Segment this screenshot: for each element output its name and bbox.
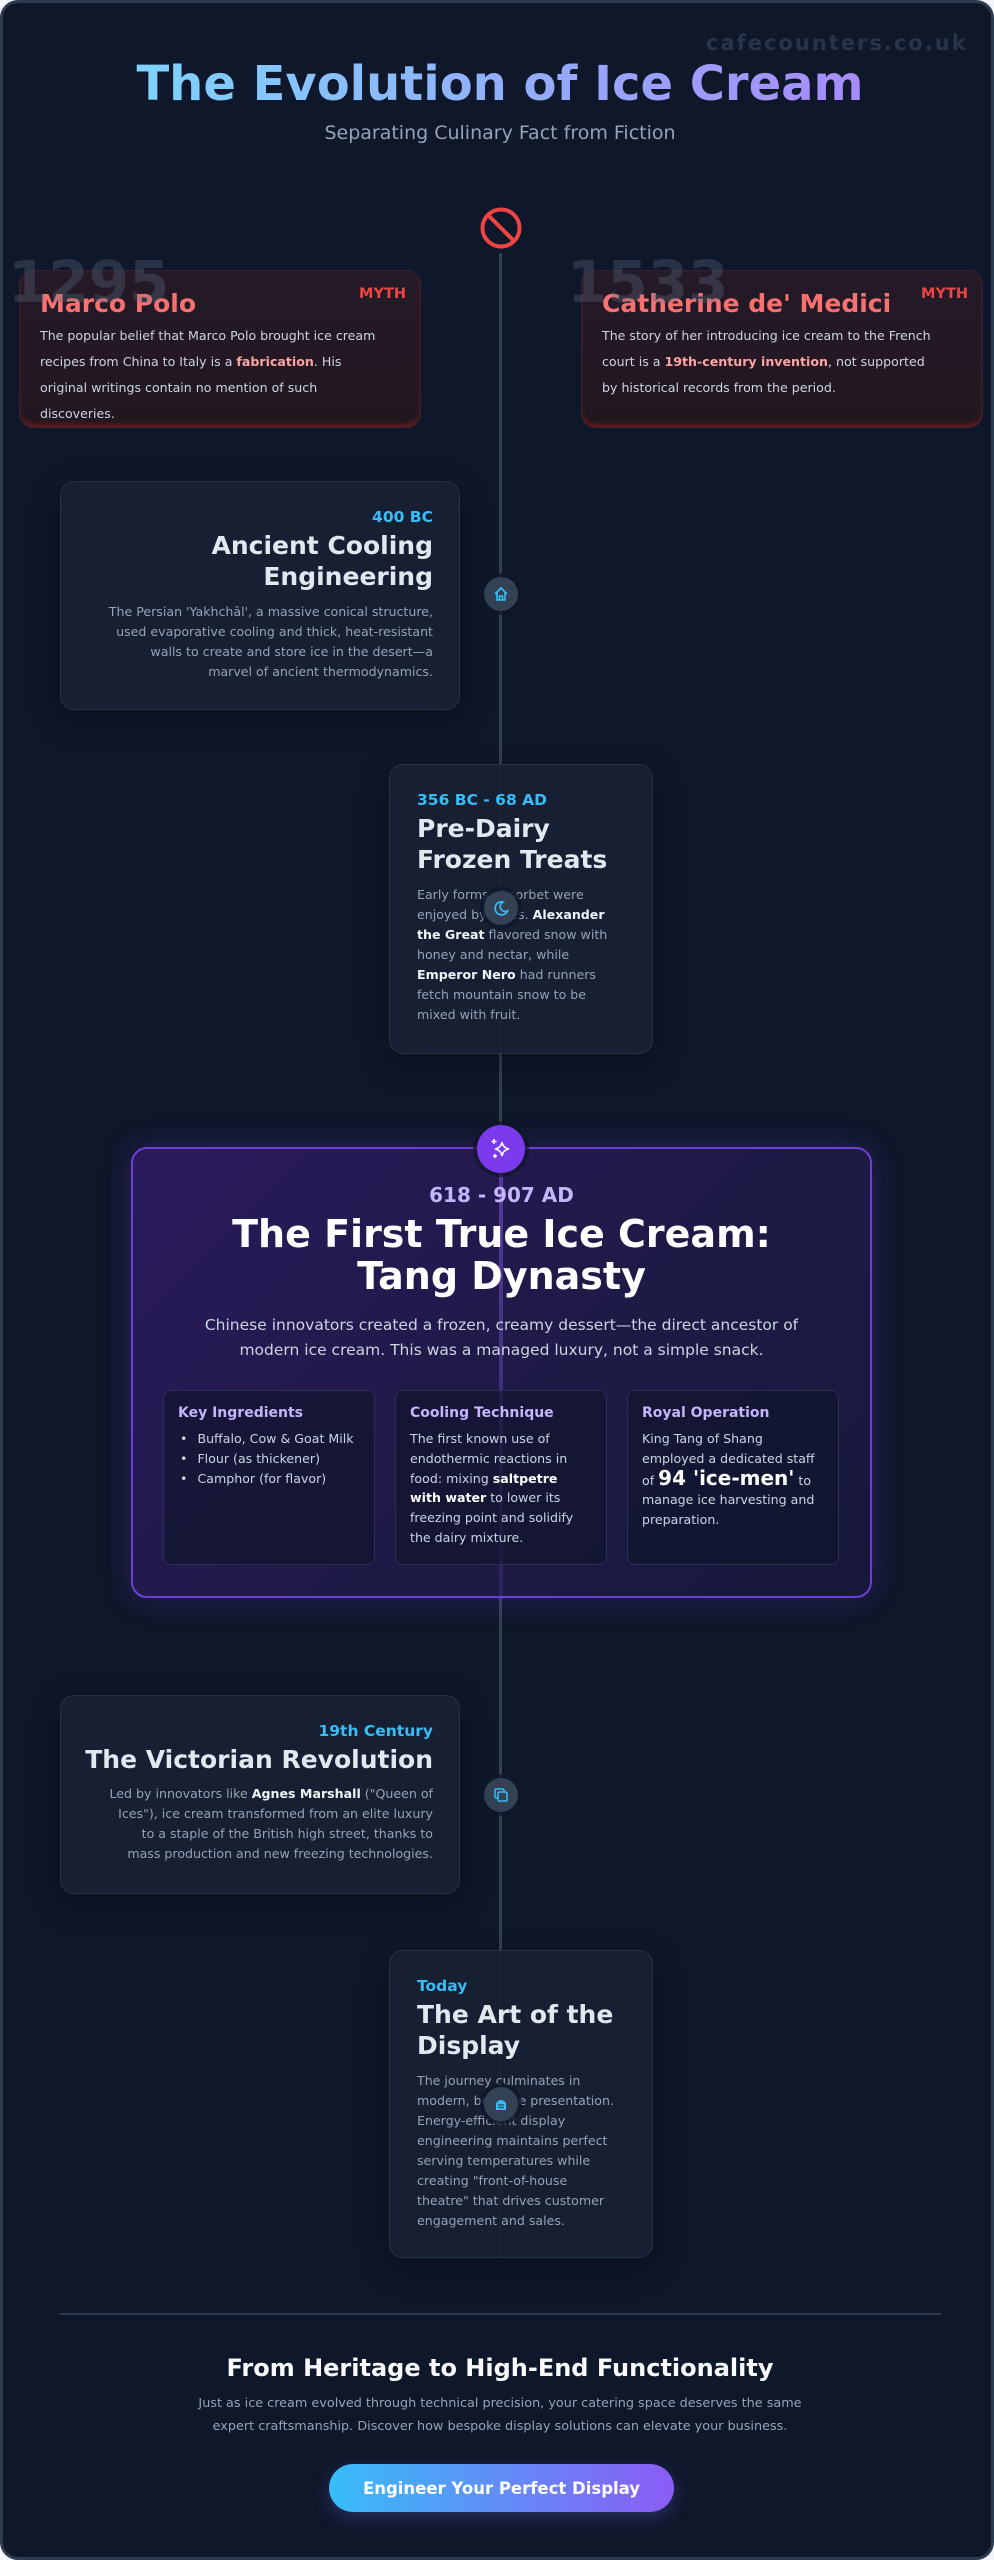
sub-panel: cooling technique: The first known use of endothermic reactions in food: mixing saltpetre with water to lower its freezing point and solidify the dairy mixture.: [410, 1431, 573, 1545]
divider: [60, 2313, 941, 2315]
button: [329, 2464, 674, 2512]
date: 19th Century: [318, 1722, 433, 1740]
text: The Persian 'Yakhchāl', a massive conical structure, used evaporative cooling and thick, heat-resistant walls to create and store ice in the desert—a marvel of ancient thermodynamics.: [109, 604, 433, 679]
sub-panel: cooling technique: Cooling Technique: [410, 1405, 554, 1421]
sub-panel: key ingredients: [163, 1390, 375, 1565]
footer text: Just as ice cream evolved through technical precision, your catering space deserves the same expert craftsmanship. Discover how bespoke display solutions can elevate your business.: [198, 2396, 802, 2434]
label: myth tag: MYTH: [921, 286, 968, 302]
panel: myth Catherine de' Medici: [581, 270, 983, 428]
heading: The First True Ice Cream:: [232, 1212, 771, 1256]
date: Today: [417, 1977, 467, 1995]
text: Catherine myth: The story of her introducing ice cream to the French court is a 19th-century invention, not supported by historical records from the period.: [602, 328, 931, 395]
heading: Catherine: Catherine de' Medici: [602, 289, 891, 318]
heading: Marco Polo: Marco Polo: [40, 289, 196, 318]
heading: The Victorian Revolution: [85, 1745, 433, 1774]
heading: [417, 2000, 613, 2060]
icon: sparkle node: [477, 1125, 525, 1173]
button: Engineer Your Perfect Display: [363, 2478, 640, 2498]
panel: Tang Dynasty: [131, 1147, 872, 1598]
panel: 19th century: [60, 1695, 460, 1894]
icon: counter node: [484, 2087, 518, 2121]
icon: myth prohibited: [480, 208, 522, 248]
sub-panel: royal operation: [627, 1390, 839, 1565]
icon: display node: [484, 1778, 518, 1812]
sub-panel: royal operation: King Tang of Shang employed a dedicated staff of 94 'ice-men' to manage ice harvesting and preparation.: [642, 1431, 815, 1527]
year 1295: 1295: [8, 248, 169, 316]
date: 356 BC - 68 AD: [417, 791, 547, 809]
watermark: cafecounters.co.uk: [706, 31, 968, 55]
label: myth tag: MYTH: [359, 286, 406, 302]
text: Marco Polo myth: The popular belief that Marco Polo brought ice cream recipes from China to Italy is a fabrication. His original writings contain no mention of such discoveries.: [40, 328, 375, 421]
text: The journey culminates in modern, bespoke presentation. Energy-efficient display engineering maintains perfect serving temperatures while creating "front-of-house theatre" that drives customer engagement and sales.: [417, 2073, 614, 2228]
panel: 356 BC - 68 AD: [389, 764, 653, 1054]
icon: house node: [484, 577, 518, 611]
panel: 400 BC: [60, 481, 460, 710]
sub-panel: royal operation: Royal Operation: [642, 1405, 770, 1421]
heading: [212, 531, 433, 591]
text: Chinese innovators created a frozen, creamy dessert—the direct ancestor of modern ice cream. This was a managed luxury, not a simple snack.: [205, 1316, 798, 1359]
title: The Evolution of Ice Cream: [136, 56, 864, 112]
sub-panel: key ingredients: Flour (as thickener): [197, 1451, 320, 1466]
heading: The Art of the: [417, 2000, 613, 2029]
heading: Engineering: [263, 562, 433, 591]
footer heading: From Heritage to High-End Functionality: [227, 2354, 773, 2382]
sub-panel: cooling technique: [395, 1390, 607, 1565]
year 1533: 1533: [567, 248, 728, 316]
panel: myth Marco Polo: [19, 270, 421, 428]
line overlay: [499, 1149, 503, 1596]
text: Early forms of sorbet were enjoyed by elites. Alexander the Great flavored snow with honey and nectar, while Emperor Nero had runners fetch mountain snow to be mixed with fruit.: [417, 887, 607, 1022]
heading: Display: [417, 2031, 520, 2060]
subtitle: Separating Culinary Fact from Fiction: [324, 122, 676, 144]
sub-panel: key ingredients: Key Ingredients: [178, 1405, 303, 1421]
sub-panel: key ingredients: Buffalo, Cow & Goat Milk: [197, 1431, 354, 1446]
heading: [417, 814, 607, 874]
timeline line: [499, 253, 502, 2258]
heading: Frozen Treats: [417, 845, 607, 874]
text: Led by innovators like Agnes Marshall ("Queen of Ices"), ice cream transformed from an elite luxury to a staple of the British high street, thanks to mass production and new freezing technologies.: [109, 1786, 433, 1861]
date: 400 BC: [372, 508, 433, 526]
date: 618 - 907 AD: [429, 1183, 574, 1207]
heading: [232, 1212, 771, 1298]
heading: Tang Dynasty: [357, 1254, 646, 1298]
sub-panel: key ingredients: Camphor (for flavor): [197, 1471, 326, 1486]
heading: Ancient Cooling: [212, 531, 433, 560]
heading: Pre-Dairy: [417, 814, 550, 843]
icon: moon node: [484, 891, 518, 925]
panel: today: [389, 1950, 653, 2258]
